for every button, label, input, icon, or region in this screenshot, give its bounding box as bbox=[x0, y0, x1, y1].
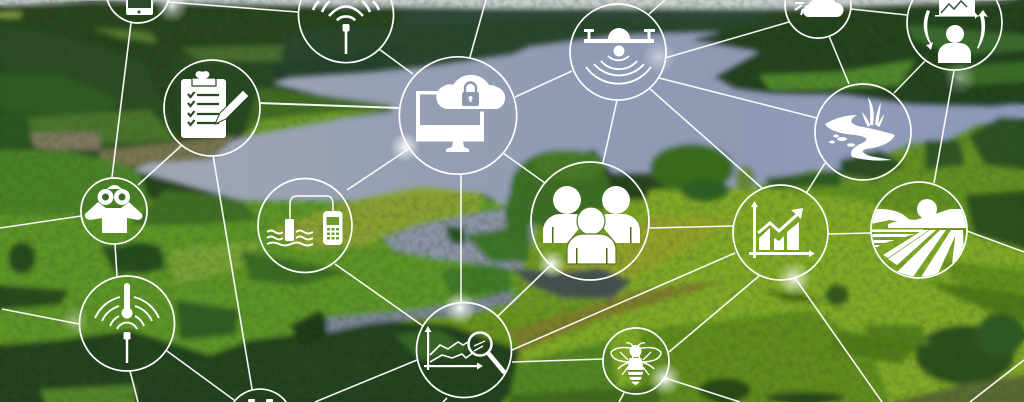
icon: smartphone bbox=[126, 0, 153, 15]
icon: sun and cloud bbox=[795, 0, 844, 17]
town bbox=[30, 132, 100, 150]
peninsula bbox=[245, 88, 392, 132]
island trees bbox=[510, 150, 610, 230]
lake bbox=[133, 32, 1024, 210]
icon: thermometer with wifi signal bbox=[95, 283, 159, 363]
icon: wifi antenna bbox=[313, 1, 379, 54]
icon: person with data cycle bbox=[924, 0, 988, 63]
icon: group of people bbox=[543, 186, 640, 264]
icon: bottom node figure bbox=[248, 399, 273, 402]
icon: monitor with secure cloud bbox=[416, 75, 505, 152]
icon: farmland fields bbox=[871, 199, 967, 280]
icon: magnified data chart bbox=[424, 326, 504, 372]
icon: drone with signal bbox=[584, 28, 655, 84]
icon: clipboard and pencil bbox=[181, 70, 249, 138]
icon: rising bar chart bbox=[749, 201, 815, 258]
right bank bbox=[752, 118, 1024, 250]
lower left trees and pasture bbox=[0, 150, 150, 235]
icon: river with reeds bbox=[825, 97, 895, 161]
headland bbox=[270, 186, 483, 250]
icon: honey bee bbox=[611, 343, 661, 385]
right hills bbox=[692, 0, 1024, 105]
icon: observer with binoculars bbox=[85, 185, 142, 233]
river bbox=[383, 200, 535, 272]
left hillside forest bbox=[0, 25, 172, 150]
meadow bbox=[500, 187, 1024, 402]
bottom forest bbox=[0, 320, 520, 402]
icon: water probe and handheld meter bbox=[267, 196, 342, 246]
shadows on meadow bbox=[760, 291, 825, 303]
sky bbox=[0, 0, 1024, 12]
